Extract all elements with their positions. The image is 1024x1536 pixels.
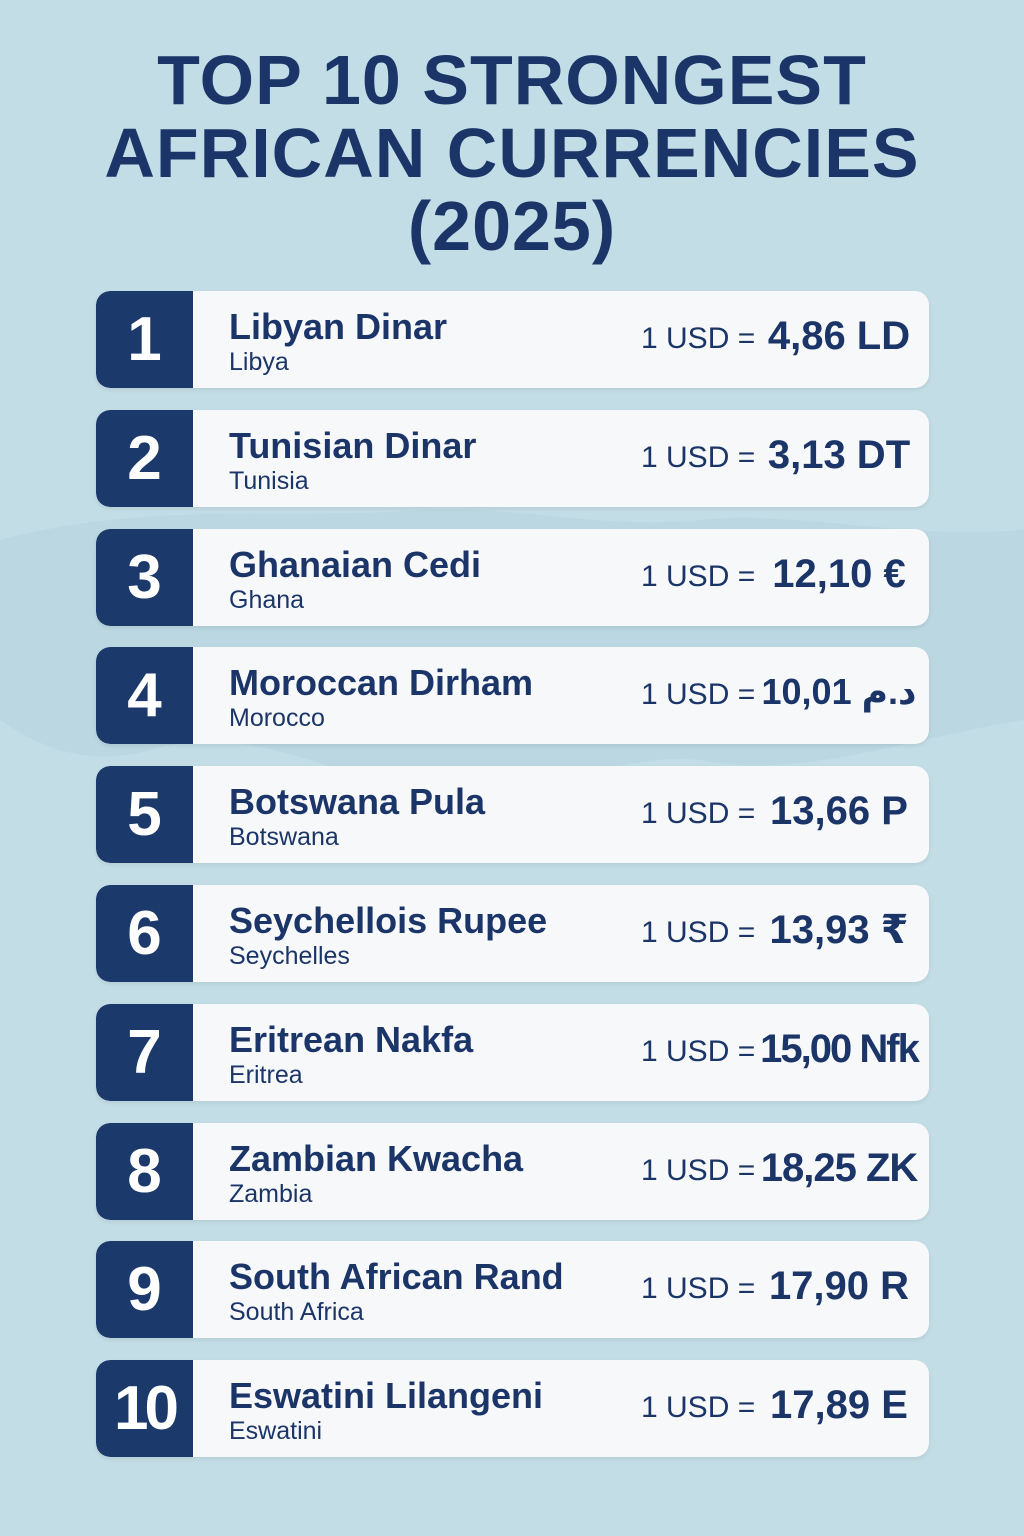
row 4 [96, 647, 929, 744]
row 1: Libya [229, 348, 289, 376]
row 6: Seychellois Rupee [229, 900, 547, 941]
row 1: 4,86 LD [768, 314, 910, 358]
row 4: 10,01 د.م [762, 671, 916, 712]
row 9 [96, 1241, 929, 1338]
row 2 [96, 410, 929, 507]
row 10: 10 [114, 1374, 175, 1443]
row 10: 1 USD = [641, 1391, 755, 1424]
row 3: 12,10 € [772, 552, 906, 596]
row 8 [96, 1123, 929, 1220]
row 2: Tunisian Dinar [229, 425, 476, 466]
row 7 [96, 1004, 929, 1101]
row 3: Ghana [229, 586, 304, 614]
row 3: Ghanaian Cedi [229, 544, 481, 585]
row 7: 1 USD = [641, 1035, 755, 1068]
row 4: Moroccan Dirham [229, 662, 533, 703]
row 7: Eritrea [229, 1061, 303, 1089]
row 1 [96, 291, 929, 388]
row 3: 3 [127, 543, 162, 612]
row 2: Tunisia [229, 467, 309, 495]
row 9: South Africa [229, 1298, 364, 1326]
row 6: 13,93 ₹ [769, 908, 909, 952]
row 6: Seychelles [229, 942, 350, 970]
row 8: 8 [127, 1137, 162, 1206]
row 4: 1 USD = [641, 678, 755, 711]
row 9: 1 USD = [641, 1272, 755, 1305]
row 9: 9 [127, 1255, 162, 1324]
row 5: 1 USD = [641, 797, 755, 830]
row 5: 13,66 P [770, 789, 908, 833]
row 7: 15,00 Nfk [760, 1027, 918, 1071]
row 8: 1 USD = [641, 1154, 755, 1187]
row 5: 5 [127, 780, 162, 849]
row 7: 7 [127, 1018, 162, 1087]
row 9: South African Rand [229, 1256, 564, 1297]
row 1: 1 USD = [641, 322, 755, 355]
row 10 [96, 1360, 929, 1457]
row 8: 18,25 ZK [761, 1146, 917, 1190]
row 6: 6 [127, 899, 162, 968]
title: AFRICAN CURRENCIES [104, 114, 920, 192]
row 7: Eritrean Nakfa [229, 1019, 473, 1060]
row 5: Botswana Pula [229, 781, 485, 822]
row 1: Libyan Dinar [229, 306, 447, 347]
row 5: Botswana [229, 823, 339, 851]
row 2: 3,13 DT [768, 433, 910, 477]
row 6 [96, 885, 929, 982]
row 9: 17,90 R [769, 1264, 909, 1308]
row 3: 1 USD = [641, 560, 755, 593]
row 6: 1 USD = [641, 916, 755, 949]
row 10: 17,89 E [770, 1383, 908, 1427]
row 4: Morocco [229, 704, 325, 732]
title: TOP 10 STRONGEST [157, 41, 867, 119]
background map [22, 514, 1021, 762]
row 8: Zambia [229, 1180, 312, 1208]
title [104, 41, 920, 265]
title: (2025) [408, 187, 616, 265]
row 5 [96, 766, 929, 863]
row 8: Zambian Kwacha [229, 1138, 523, 1179]
row 3 [96, 529, 929, 626]
row 10: Eswatini [229, 1417, 322, 1445]
row 10: Eswatini Lilangeni [229, 1375, 543, 1416]
row 1: 1 [127, 305, 162, 374]
row 2: 2 [127, 424, 162, 493]
row 4: 4 [127, 661, 162, 730]
row 2: 1 USD = [641, 441, 755, 474]
